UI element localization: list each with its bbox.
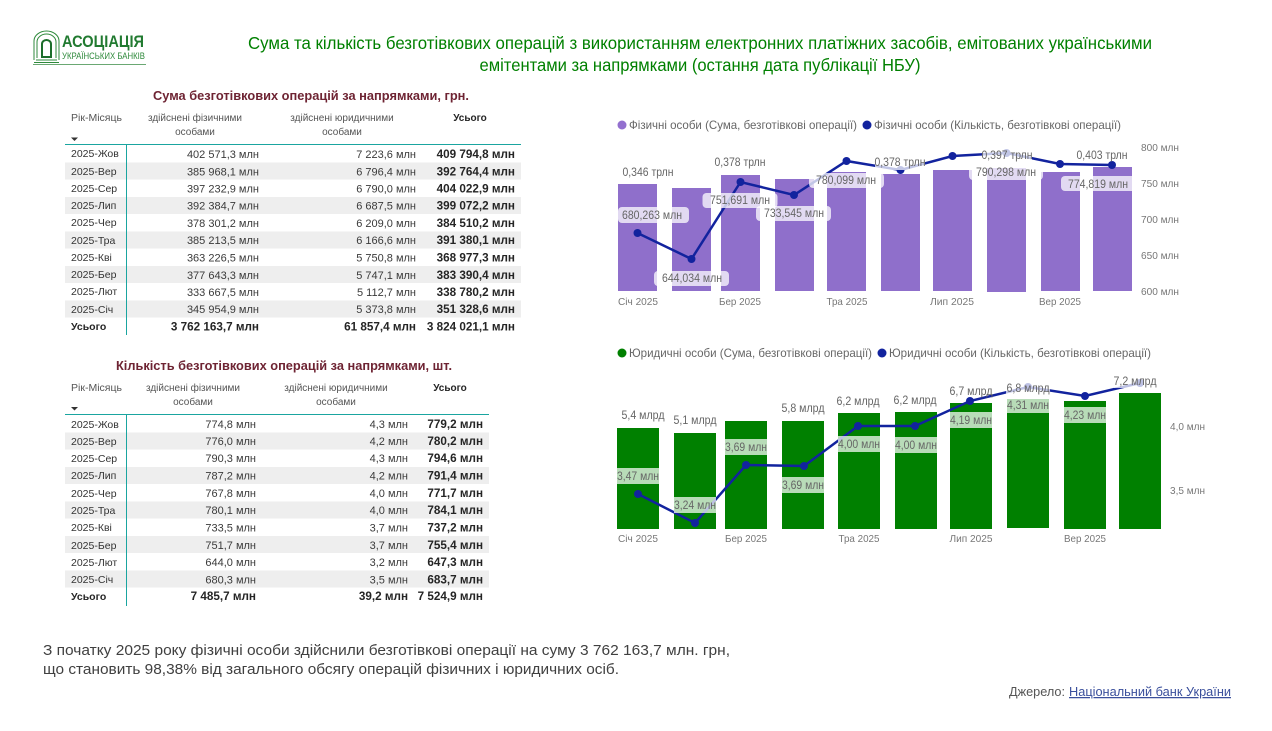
table rows: 751,7 млн — [205, 540, 256, 552]
table rows: 2025-Вер — [71, 436, 117, 448]
table rows: 2025-Січ — [71, 574, 113, 586]
summary text: що становить 98,38% від загального обсягу операцій фізичних і юридичних осіб. — [43, 661, 619, 678]
count labels: 790,298 млн — [976, 167, 1036, 179]
table rows: 39,2 млн — [359, 590, 408, 603]
striped row backgrounds — [65, 162, 521, 318]
table rows: 378 301,2 млн — [187, 218, 259, 230]
table rows: 383 390,4 млн — [437, 269, 515, 282]
table rows: 7 223,6 млн — [356, 149, 416, 161]
table rows: 776,0 млн — [205, 436, 256, 448]
table rows: 4,3 млн — [370, 419, 408, 431]
count labels — [622, 167, 1128, 285]
legend: Фізичні особи (Кількість, безготівкові операції) — [874, 118, 1121, 132]
line — [634, 149, 1116, 263]
table header: здійснені юридичними — [284, 383, 388, 394]
table rows: 680,3 млн — [205, 574, 256, 586]
x axis: Січ 2025 — [618, 533, 658, 545]
table rows: 2025-Чер — [71, 217, 117, 229]
count labels: 3,24 млн — [674, 500, 716, 512]
source: Джерело: — [1009, 685, 1065, 699]
table rows: 4,2 млн — [370, 436, 408, 448]
right axis: 800 млн — [1141, 142, 1179, 154]
x axis: Бер 2025 — [725, 533, 767, 545]
table rows: 385 968,1 млн — [187, 166, 259, 178]
table rows: Усього — [71, 321, 106, 333]
legend: Юридичні особи (Сума, безготівкові операції) — [629, 346, 872, 360]
table rows: 6 796,4 млн — [356, 166, 416, 178]
sum labels: 6,2 млрд — [894, 395, 937, 407]
table rows: 780,1 млн — [205, 505, 256, 517]
count labels: 3,69 млн — [782, 480, 824, 492]
table header: особами — [173, 396, 213, 408]
table rows: 733,5 млн — [205, 522, 256, 534]
table rows: 2025-Жов — [71, 148, 119, 160]
table rows: 2025-Бер — [71, 269, 117, 281]
right axis: 3,5 млн — [1170, 485, 1205, 497]
count labels: 4,31 млн — [1007, 400, 1049, 412]
right axis: 750 млн — [1141, 178, 1179, 190]
striped row backgrounds — [65, 432, 489, 588]
x axis: Вер 2025 — [1064, 533, 1106, 545]
count labels: 780,099 млн — [816, 175, 876, 187]
table rows: 6 209,0 млн — [356, 218, 416, 230]
data label backgrounds — [618, 148, 1136, 286]
sum labels: 6,2 млрд — [836, 396, 880, 408]
table rows: 2025-Жов — [71, 419, 119, 431]
table rows: 2025-Тра — [71, 505, 116, 517]
table rows: 404 022,9 млн — [437, 182, 515, 196]
table header: здійснені фізичними — [148, 112, 242, 124]
sum labels: 5,4 млрд — [622, 410, 665, 422]
chart: individuals — [618, 118, 1179, 308]
right axis — [1141, 142, 1179, 298]
table rows: 779,2 млн — [427, 418, 483, 431]
x axis: Тра 2025 — [838, 533, 880, 545]
table header — [71, 112, 487, 141]
table rows: 683,7 млн — [427, 574, 483, 586]
table rows: 2025-Лют — [71, 286, 117, 298]
table header: Рік-Місяць — [71, 383, 122, 394]
sum labels: 0,346 трлн — [622, 167, 674, 179]
table rows: 767,8 млн — [205, 488, 256, 500]
table rows: 2025-Чер — [71, 488, 117, 500]
icon: arch — [34, 31, 59, 62]
table rows: 2025-Вер — [71, 166, 117, 178]
sum labels — [622, 150, 1128, 179]
x axis: Лип 2025 — [930, 296, 974, 308]
legend — [618, 118, 1121, 132]
count labels — [617, 400, 1106, 512]
table rows: 391 380,1 млн — [437, 234, 515, 247]
source: Національний банк України — [1069, 685, 1231, 699]
table rows: 338 780,2 млн — [437, 286, 515, 299]
table rows: 61 857,4 млн — [344, 320, 416, 334]
table rows: 755,4 млн — [427, 539, 483, 552]
table rows: 351 328,6 млн — [437, 303, 515, 316]
table header: Усього — [433, 383, 467, 394]
x axis — [618, 533, 1106, 545]
table rows: 3,2 млн — [370, 557, 408, 569]
table rows: 345 954,9 млн — [187, 304, 259, 316]
table rows: 392 384,7 млн — [187, 200, 259, 212]
table rows: 363 226,5 млн — [187, 252, 259, 264]
table rows: 2025-Січ — [71, 304, 113, 316]
logo: АСОЦІАЦІЯ — [62, 32, 144, 51]
count labels: 4,19 млн — [950, 415, 992, 427]
count labels: 774,819 млн — [1068, 179, 1128, 191]
table rows: 4,3 млн — [370, 453, 408, 465]
table rows: 784,1 млн — [427, 504, 483, 517]
bars — [617, 393, 1161, 529]
table rows: 647,3 млн — [427, 556, 483, 569]
x axis: Тра 2025 — [826, 296, 868, 308]
table header: особами — [322, 126, 362, 138]
table rows: 384 510,2 млн — [437, 217, 515, 230]
heading: sum table: Сума безготівкових операцій за напрямками, грн. — [153, 88, 469, 103]
x axis: Січ 2025 — [618, 296, 658, 308]
table rows: 2025-Бер — [71, 540, 117, 552]
table rows: 771,7 млн — [427, 487, 483, 500]
data label backgrounds — [617, 375, 1157, 513]
table rows: 385 213,5 млн — [187, 235, 259, 247]
table rows: 5 373,8 млн — [356, 304, 416, 316]
table rows: 399 072,2 млн — [437, 200, 515, 212]
table rows: 333 667,5 млн — [187, 287, 259, 299]
table rows: 2025-Лип — [71, 470, 116, 482]
count labels: 733,545 млн — [764, 208, 824, 220]
sum labels — [622, 376, 1157, 427]
count labels: 644,034 млн — [662, 273, 722, 285]
table header: особами — [316, 396, 356, 408]
table rows: 644,0 млн — [205, 557, 256, 569]
table rows — [71, 148, 515, 334]
table rows: 368 977,3 млн — [437, 252, 515, 264]
table header: здійснені фізичними — [146, 382, 240, 394]
summary text: З початку 2025 року фізичні особи здійснили безготівкові операції на суму 3 762 163,7 млн. грн, — [43, 642, 730, 659]
table rows: 7 524,9 млн — [418, 590, 483, 603]
legend: Фізичні особи (Сума, безготівкові операції) — [629, 118, 857, 132]
table rows: 3 762 163,7 млн — [171, 320, 259, 334]
table: sum by direction — [65, 112, 521, 335]
right axis: 700 млн — [1141, 214, 1179, 226]
count labels: 3,47 млн — [617, 471, 659, 483]
x axis: Лип 2025 — [950, 533, 993, 545]
count labels: 3,69 млн — [725, 442, 767, 454]
sum labels: 6,7 млрд — [950, 386, 993, 398]
x axis: Бер 2025 — [719, 296, 761, 308]
sum labels: 0,397 трлн — [982, 150, 1032, 162]
table rows: 2025-Сер — [71, 183, 117, 195]
table header — [71, 382, 467, 410]
legend: Юридичні особи (Кількість, безготівкові операції) — [889, 346, 1151, 360]
sum labels: 7,2 млрд — [1114, 376, 1157, 388]
table rows: 397 232,9 млн — [187, 184, 259, 196]
table rows: 5 112,7 млн — [357, 287, 416, 299]
right axis: 600 млн — [1141, 286, 1179, 298]
sum labels: 0,403 трлн — [1076, 150, 1128, 162]
x axis — [618, 296, 1081, 308]
table header: Рік-Місяць — [71, 113, 122, 124]
table rows: 3,7 млн — [370, 522, 408, 534]
table rows: 402 571,3 млн — [187, 149, 259, 161]
title — [248, 33, 1152, 75]
table rows: 5 750,8 млн — [356, 252, 416, 264]
logo: УКРАЇНСЬКИХ БАНКІВ — [62, 51, 145, 62]
table rows: 791,4 млн — [427, 470, 483, 482]
chart: legal entities — [617, 346, 1205, 545]
table rows: 392 764,4 млн — [437, 166, 515, 178]
table rows: 4,0 млн — [370, 488, 408, 500]
right axis: 4,0 млн — [1170, 421, 1205, 433]
table rows: 737,2 млн — [427, 522, 483, 534]
table rows: 2025-Лют — [71, 557, 117, 569]
title: емітентами за напрямками (остання дата публікації НБУ) — [480, 55, 920, 75]
table rows: 377 643,3 млн — [187, 270, 259, 282]
table rows: 4,0 млн — [370, 505, 408, 517]
count labels: 4,23 млн — [1064, 410, 1106, 422]
count labels: 751,691 млн — [710, 195, 770, 207]
table rows: 2025-Тра — [71, 235, 116, 247]
bars — [618, 167, 1132, 292]
sum labels: 0,378 трлн — [874, 157, 926, 169]
right axis: 650 млн — [1141, 250, 1179, 262]
count labels: 4,00 млн — [895, 440, 937, 452]
table rows: 3 824 021,1 млн — [427, 320, 515, 334]
table rows: 787,2 млн — [205, 470, 256, 482]
sum labels: 6,8 млрд — [1006, 383, 1050, 395]
table rows: 6 687,5 млн — [356, 200, 416, 212]
summary text — [43, 642, 730, 678]
table rows: 2025-Сер — [71, 453, 117, 465]
table rows: Усього — [71, 591, 106, 603]
table: count by direction — [65, 382, 489, 606]
sum labels: 5,1 млрд — [674, 415, 717, 427]
table rows: 3,7 млн — [370, 540, 408, 552]
table rows — [71, 418, 483, 603]
table header: особами — [175, 126, 215, 138]
title: Сума та кількість безготівкових операцій з використанням електронних платіжних засобів, емітованих українськими — [248, 33, 1152, 53]
sum labels: 0,378 трлн — [714, 157, 766, 169]
right axis — [1170, 421, 1205, 497]
table rows: 5 747,1 млн — [356, 270, 416, 282]
legend — [618, 346, 1151, 360]
logo — [33, 31, 146, 65]
table rows: 3,5 млн — [370, 574, 408, 586]
table rows: 780,2 млн — [427, 435, 483, 448]
count labels: 4,00 млн — [838, 439, 880, 451]
count labels: 680,263 млн — [622, 210, 682, 222]
table header: здійснені юридичними — [290, 113, 394, 124]
table rows: 2025-Кві — [71, 522, 112, 534]
x axis: Вер 2025 — [1039, 296, 1081, 308]
sum labels: 5,8 млрд — [782, 403, 825, 415]
table rows: 7 485,7 млн — [191, 590, 256, 603]
table rows: 790,3 млн — [205, 453, 256, 465]
table rows: 2025-Лип — [71, 200, 116, 212]
table rows: 2025-Кві — [71, 252, 112, 264]
table rows: 774,8 млн — [205, 419, 256, 431]
table rows: 4,2 млн — [370, 470, 408, 482]
table rows: 794,6 млн — [427, 452, 483, 465]
line — [634, 379, 1144, 527]
table rows: 6 166,6 млн — [356, 235, 416, 247]
table rows: 409 794,8 млн — [437, 148, 515, 161]
table rows: 6 790,0 млн — [356, 184, 416, 196]
heading: count table: Кількість безготівкових операцій за напрямками, шт. — [116, 358, 452, 373]
table header: Усього — [453, 113, 487, 124]
